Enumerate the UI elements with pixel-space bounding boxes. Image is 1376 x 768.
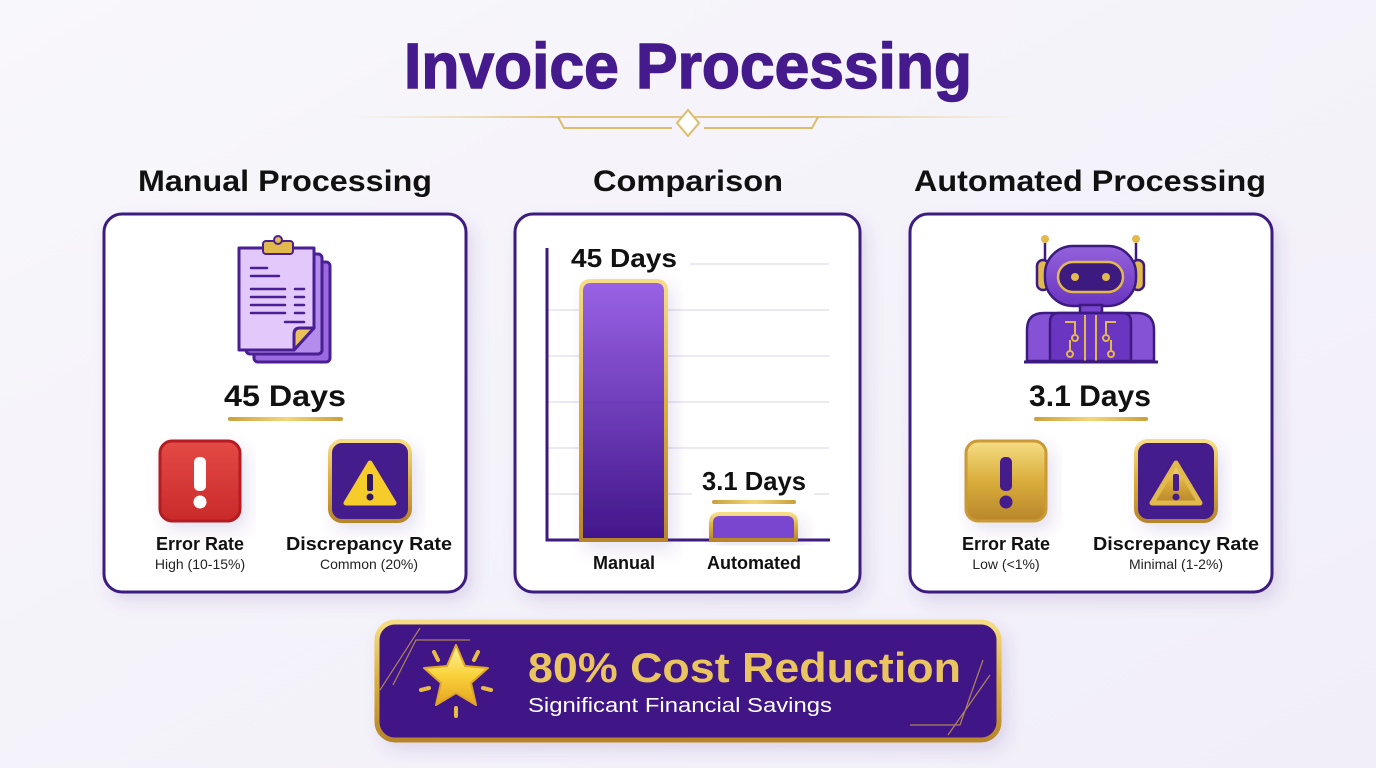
heading: automated: Automated Processing	[914, 165, 1266, 198]
bar: manual	[581, 281, 666, 540]
label: discrepancy rate: Discrepancy Rate	[1093, 534, 1259, 554]
panel: comparison chart	[515, 214, 860, 592]
label: 45 days: 45 Days	[571, 243, 677, 273]
panel: automated	[910, 214, 1272, 592]
label: error rate: Error Rate	[156, 534, 244, 554]
label: error rate: Error Rate	[962, 534, 1050, 554]
panel: comparison chart: Automated	[707, 553, 801, 573]
icon: star	[421, 645, 491, 716]
label: 3.1 days: 3.1 Days	[702, 466, 806, 496]
icon: discrepancy warning	[330, 441, 410, 521]
axis labels: Manual	[593, 553, 655, 573]
panel: manual: High (10-15%)	[155, 556, 245, 572]
panel: automated: Low (<1%)	[972, 556, 1040, 572]
stat: 3.1 days: 3.1 Days	[1029, 380, 1151, 413]
title: Invoice Processing	[404, 30, 972, 102]
bar: automated	[711, 514, 796, 540]
panel: manual	[104, 214, 466, 592]
icon: error gold	[966, 441, 1046, 521]
stat: 45 days: 45 Days	[224, 380, 346, 413]
banner: cost reduction	[377, 622, 999, 740]
icon: clipboard	[239, 236, 330, 362]
icon: discrepancy gold warning	[1136, 441, 1216, 521]
banner: cost reduction: Significant Financial Savings	[528, 695, 832, 717]
title ornament	[350, 110, 1025, 136]
icon: robot	[1024, 235, 1158, 362]
banner text: 80% Cost Reduction	[528, 644, 961, 691]
heading: manual: Manual Processing	[138, 165, 432, 198]
label: discrepancy rate: Discrepancy Rate	[286, 534, 452, 554]
icon: error red	[160, 441, 240, 521]
heading: comparison: Comparison	[593, 165, 783, 198]
panel: manual: Common (20%)	[320, 556, 418, 572]
panel: automated: Minimal (1-2%)	[1129, 556, 1223, 572]
